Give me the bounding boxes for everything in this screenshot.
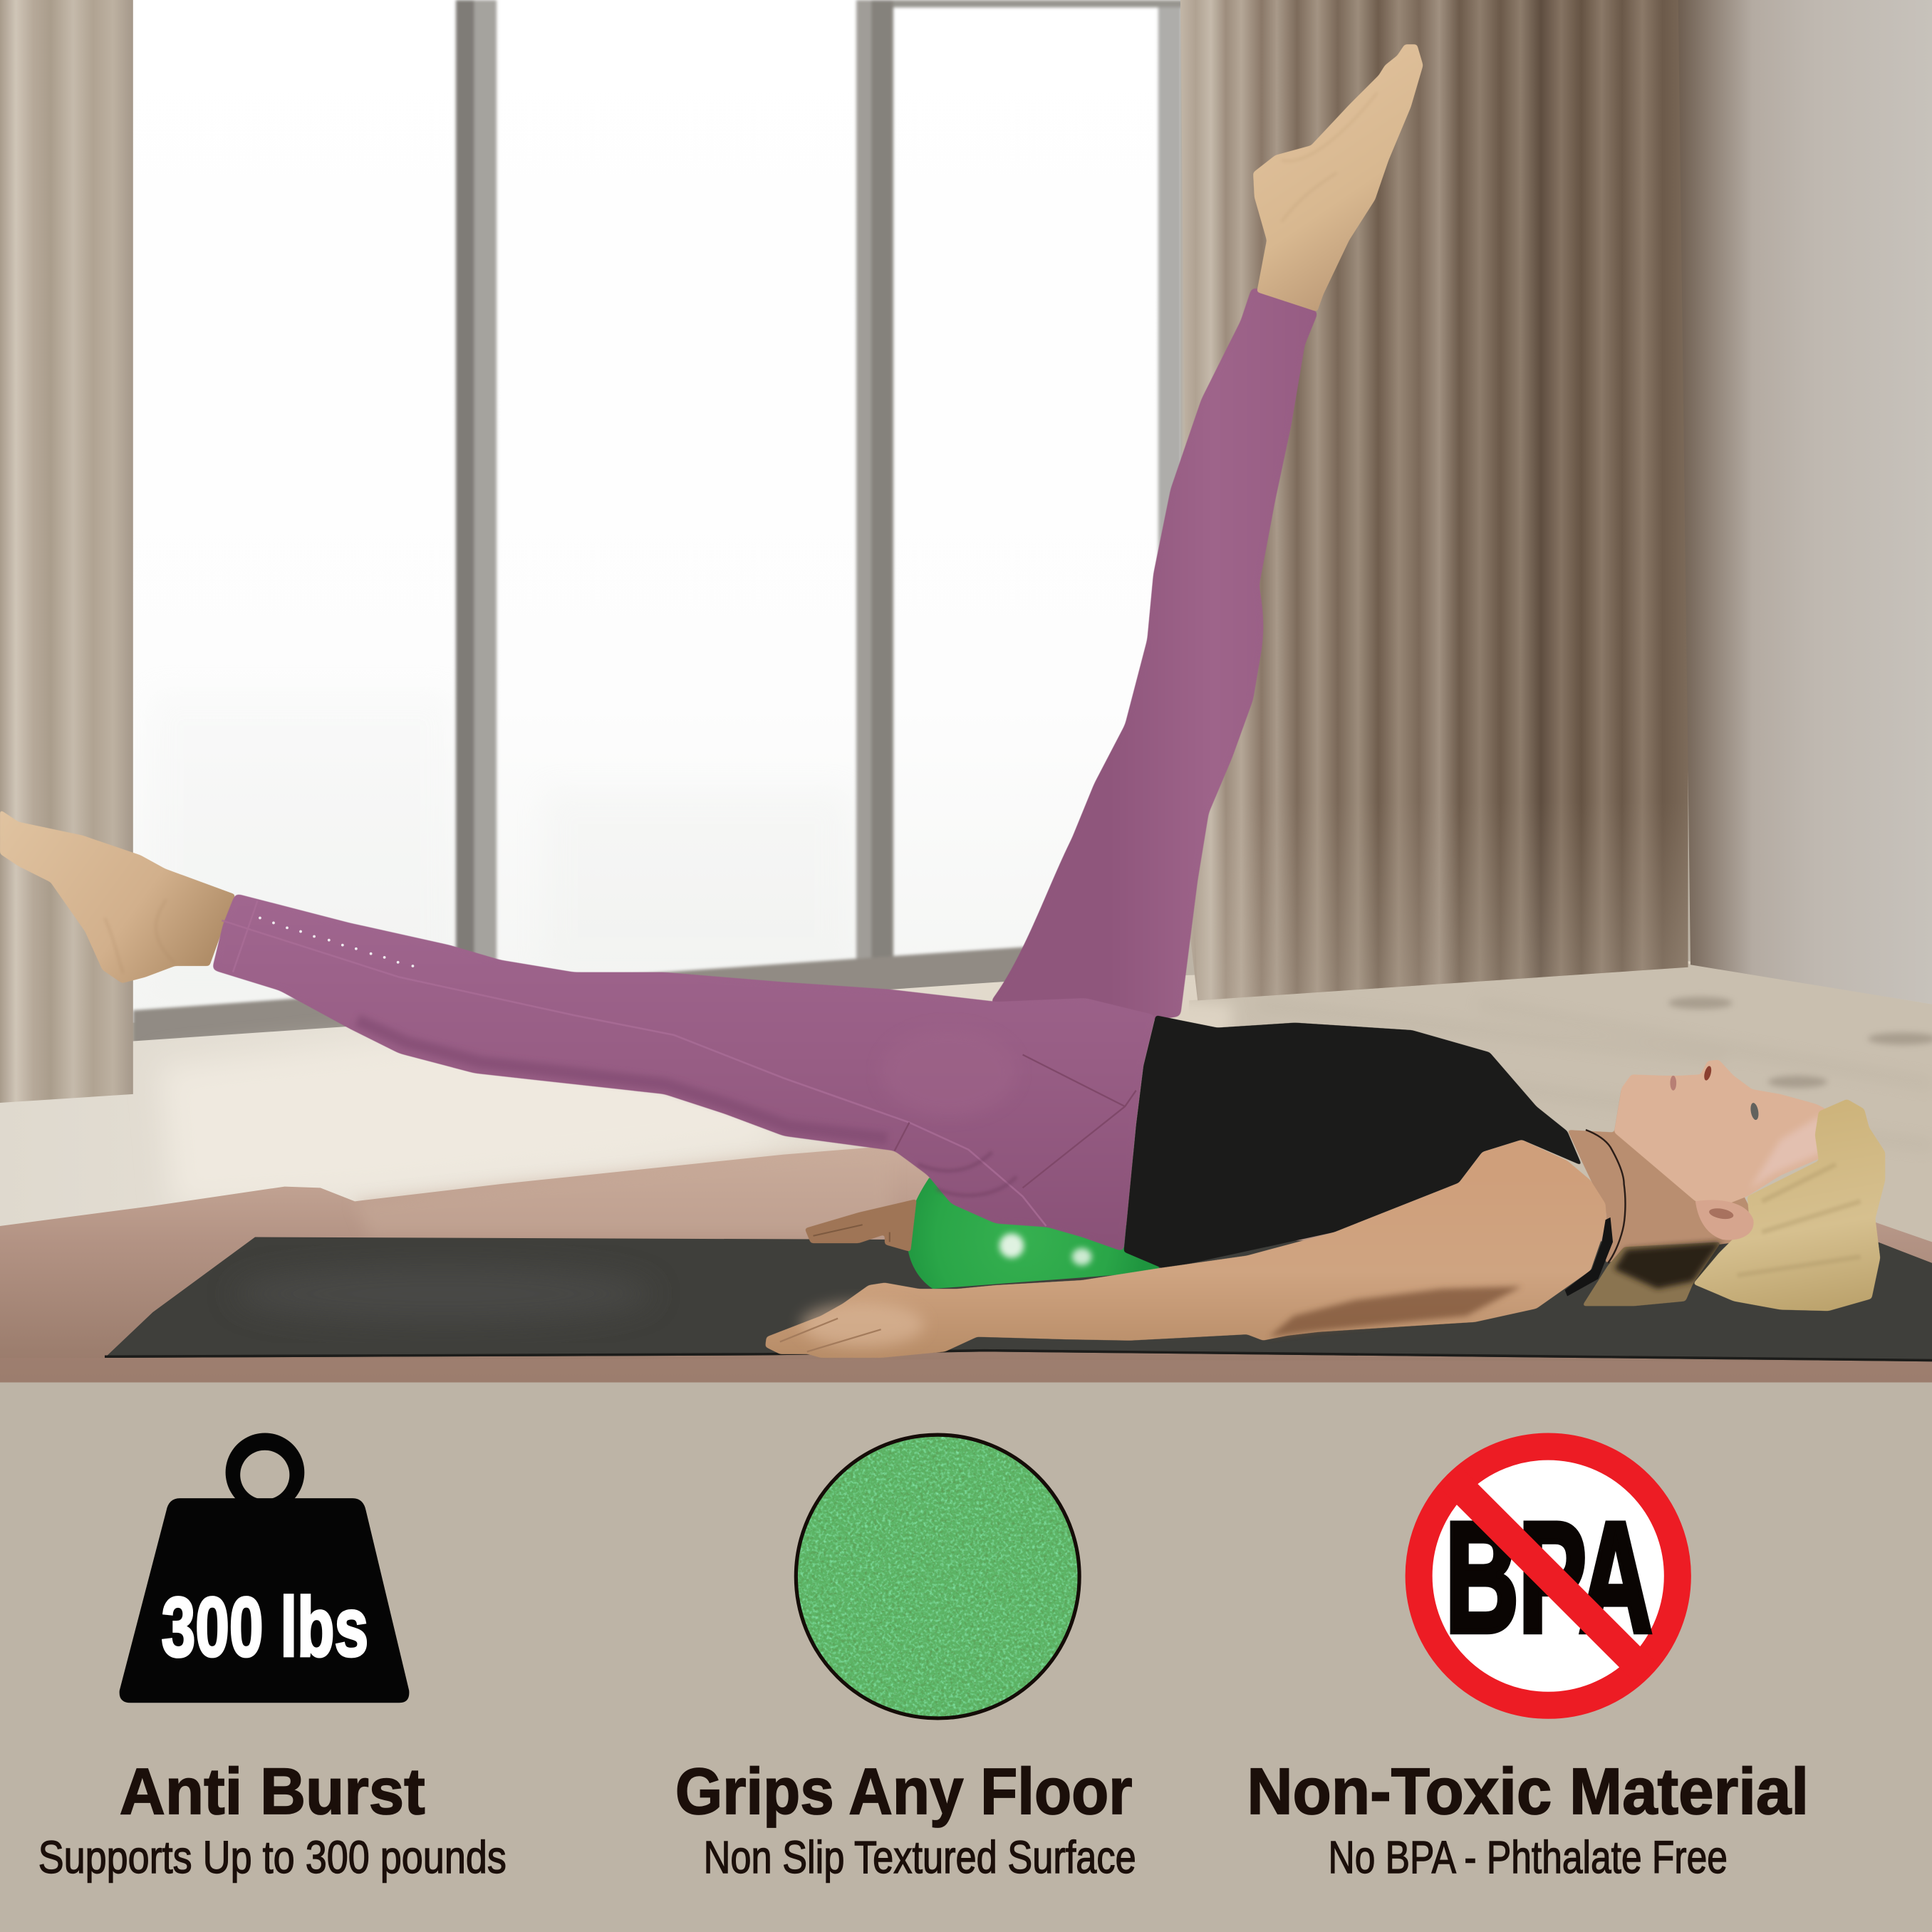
legging seams	[222, 900, 1046, 1226]
icon: textured green circle	[796, 1435, 1079, 1718]
panel: feature strip background	[0, 1383, 1932, 1932]
tank strap	[1565, 1217, 1613, 1297]
far hand	[804, 1199, 917, 1252]
left curtain	[0, 0, 133, 1103]
finger lines	[780, 1319, 881, 1351]
near arm and shoulder	[765, 1140, 1606, 1358]
floor	[0, 961, 1932, 1242]
icon: no BPA sign	[1419, 1447, 1678, 1705]
black tank top	[1123, 1015, 1582, 1269]
subheading: supports up to 300 pounds: Supports Up to 300 pounds	[38, 1832, 507, 1883]
blond hair	[1693, 1099, 1885, 1311]
ear	[1695, 1200, 1754, 1240]
subheading: non slip textured surface: Non Slip Textured Surface	[704, 1832, 1136, 1883]
feature: grips any floor	[675, 1435, 1136, 1883]
icon: no BPA sign: BPA	[1445, 1490, 1652, 1665]
subheading: no BPA phthalate free: No BPA - Phthalate Free	[1328, 1832, 1728, 1883]
hip seams	[895, 1055, 1136, 1188]
face	[1614, 1059, 1829, 1208]
window frame	[133, 0, 1183, 1044]
calf underside shadow	[358, 1020, 887, 1138]
hip folds	[918, 1152, 1017, 1195]
raised foot	[1253, 44, 1423, 312]
necklace	[1586, 1130, 1625, 1263]
lowered foot	[0, 809, 235, 983]
elbow shadow	[1269, 1287, 1522, 1337]
wall	[1678, 0, 1932, 1004]
dark hair at nape	[1582, 1242, 1721, 1306]
icon: 300 lbs weight	[120, 1433, 409, 1703]
window glass	[123, 0, 1180, 1023]
exercise mat	[105, 1237, 1932, 1361]
heading: grips any floor: Grips Any Floor	[675, 1755, 1132, 1828]
nostril	[1703, 1065, 1713, 1081]
heading: anti burst: Anti Burst	[120, 1755, 425, 1828]
icon: 300 lbs weight: 300 lbs	[162, 1581, 368, 1674]
lowered leg and hips	[212, 893, 1155, 1252]
hip glute panel	[881, 1027, 1017, 1116]
panel: photo of exercise scene	[0, 0, 1932, 1383]
eye	[1750, 1102, 1760, 1121]
lips	[1670, 1076, 1676, 1091]
rug	[0, 1146, 1932, 1383]
right curtain	[1180, 0, 1688, 1000]
heading: non-toxic material: Non-Toxic Material	[1247, 1755, 1809, 1828]
feature: non-toxic material	[1247, 1447, 1809, 1883]
reflective dots	[259, 917, 414, 967]
raised leg	[990, 287, 1319, 1029]
hand highlight	[801, 1302, 924, 1346]
feature: anti burst	[38, 1433, 507, 1883]
neck	[1567, 1088, 1750, 1263]
green ball	[906, 1178, 1160, 1289]
